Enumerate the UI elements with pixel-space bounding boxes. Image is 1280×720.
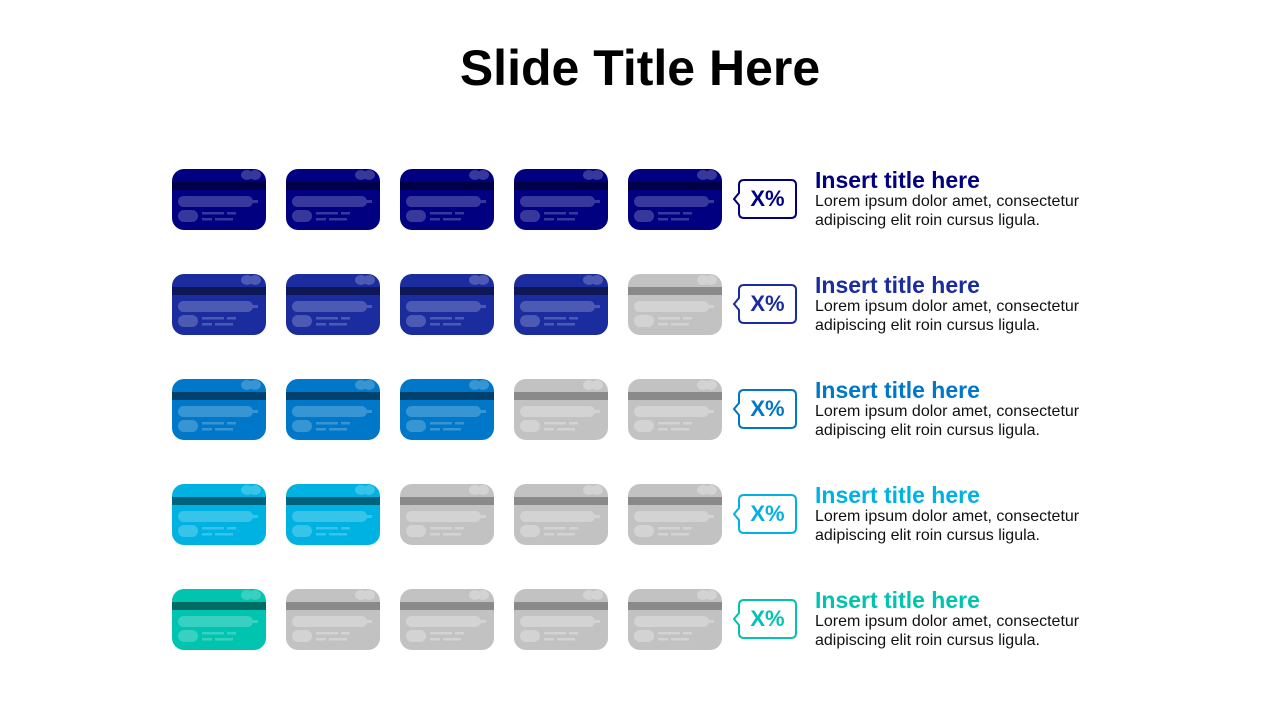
text row 1: Insert title here — [815, 167, 980, 193]
text row 3: adipiscing elit roin cursus ligula. — [815, 422, 1040, 439]
text row 1 — [815, 167, 1079, 229]
text row 4: Insert title here — [815, 482, 980, 508]
text row 5: adipiscing elit roin cursus ligula. — [815, 632, 1040, 649]
percent label 3: X% — [750, 396, 785, 421]
row 2 cards — [172, 274, 722, 335]
row 3 cards — [172, 379, 722, 440]
percent label 1: X% — [750, 186, 785, 211]
text row 2: Lorem ipsum dolor amet, consectetur — [815, 298, 1079, 315]
row 4 cards — [172, 484, 722, 545]
row 1 cards — [172, 169, 722, 230]
text row 4 — [815, 482, 1079, 544]
text row 3: Insert title here — [815, 377, 980, 403]
text row 2: Insert title here — [815, 272, 980, 298]
text row 1: Lorem ipsum dolor amet, consectetur — [815, 193, 1079, 210]
text row 4: Lorem ipsum dolor amet, consectetur — [815, 508, 1079, 525]
text row 3: Lorem ipsum dolor amet, consectetur — [815, 403, 1079, 420]
percent label 5: X% — [750, 606, 785, 631]
percent label 4: X% — [750, 501, 785, 526]
text row 4: adipiscing elit roin cursus ligula. — [815, 527, 1040, 544]
percent label 2: X% — [750, 291, 785, 316]
title: Slide Title Here — [460, 40, 820, 96]
callout bubbles — [734, 180, 796, 638]
text row 5 — [815, 587, 1079, 649]
text row 2: adipiscing elit roin cursus ligula. — [815, 317, 1040, 334]
row 5 cards — [172, 589, 722, 650]
text row 5: Insert title here — [815, 587, 980, 613]
text row 2 — [815, 272, 1079, 334]
text row 1: adipiscing elit roin cursus ligula. — [815, 212, 1040, 229]
text row 3 — [815, 377, 1079, 439]
text row 5: Lorem ipsum dolor amet, consectetur — [815, 613, 1079, 630]
